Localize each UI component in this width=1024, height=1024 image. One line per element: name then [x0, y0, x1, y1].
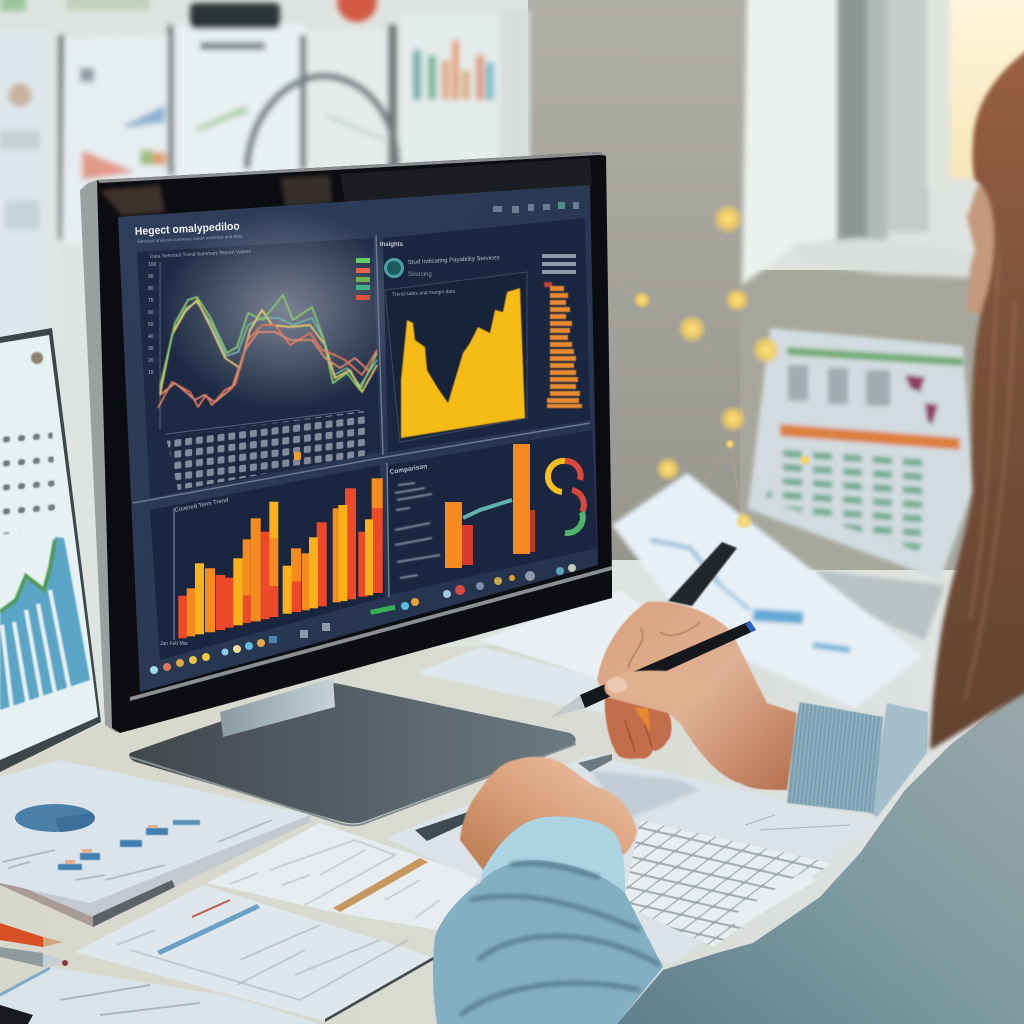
dashboard title: Hegect omalypediloo: [135, 221, 240, 238]
panel: line chart: 30: [148, 346, 154, 352]
panel: line chart: [137, 210, 410, 498]
report stack with pie chart: [0, 760, 310, 927]
panel: stacked bar chart: Covered Term Trend: [174, 498, 229, 514]
report sheet with table: [75, 885, 435, 1022]
panel: line chart: 40: [148, 334, 154, 340]
keyboard: [623, 820, 832, 947]
desk notebook: [417, 590, 690, 713]
hair and face: [930, 48, 1024, 750]
pencils: [0, 923, 70, 967]
horizontal bars: [544, 282, 582, 408]
back report sheet with table: [748, 328, 973, 580]
dashboard title: Selected analysis summary report overview and data: [137, 233, 243, 244]
pen on desk: [668, 542, 737, 606]
fairy lights: [615, 203, 811, 530]
person body: [617, 688, 1024, 1024]
panel: line chart: 20: [148, 358, 154, 364]
tablet with calendar and bar chart: [0, 328, 101, 772]
panel: line chart: 100: [148, 262, 157, 268]
keyboard sheet: [385, 754, 880, 965]
desk surface: [0, 620, 1024, 1024]
chart lines: [158, 295, 377, 408]
panel: line chart: 60: [148, 310, 154, 316]
panel: line chart: 80: [148, 286, 154, 292]
writing hand: [597, 602, 797, 790]
panel: yellow area chart: Sourcing: [408, 272, 432, 278]
panel: lower right mixed chart: [388, 430, 597, 595]
toolbar icons: [493, 202, 579, 231]
donut icon: [386, 260, 402, 276]
panel: yellow area chart: Trend sales and margin data: [392, 289, 456, 298]
panel: yellow area chart: [380, 218, 590, 452]
line-chart paper: [612, 473, 923, 708]
status icon row: [150, 564, 576, 674]
window: [742, 0, 1024, 285]
donut gauges: [548, 461, 584, 533]
dot grid: [166, 411, 368, 490]
panel: line chart: 10: [148, 370, 154, 376]
sleeve: [433, 817, 663, 1024]
sleeve cuff: [787, 702, 928, 817]
under-sheet behind report: [815, 570, 945, 640]
panel: stacked bar chart: [150, 465, 385, 660]
panel: yellow area chart: Stud Indicating Payability Services: [408, 255, 500, 266]
panel: yellow area chart: Insights: [380, 242, 404, 248]
pen in hand: [550, 621, 756, 718]
report sheet with orange highlight: [207, 823, 480, 930]
panel: line chart: 50: [148, 322, 154, 328]
panel: stacked bar chart: Jan Feb Mar: [160, 641, 188, 647]
fist hand: [460, 757, 637, 870]
monitor stand: [129, 678, 576, 825]
screen: [118, 185, 598, 692]
panel: line chart: 70: [148, 298, 154, 304]
panel: line chart: 90: [148, 274, 154, 280]
bottom corner sheet: [0, 967, 320, 1024]
legend: [356, 258, 370, 300]
thumb: [604, 670, 715, 707]
wall-mounted charts: [0, 0, 530, 350]
panel dividers: [133, 235, 590, 597]
monitor: [80, 152, 612, 733]
panel: lower right mixed chart: Comparison: [389, 463, 428, 476]
panel: line chart: Data Selected Trend Summary Report Values: [150, 249, 252, 260]
